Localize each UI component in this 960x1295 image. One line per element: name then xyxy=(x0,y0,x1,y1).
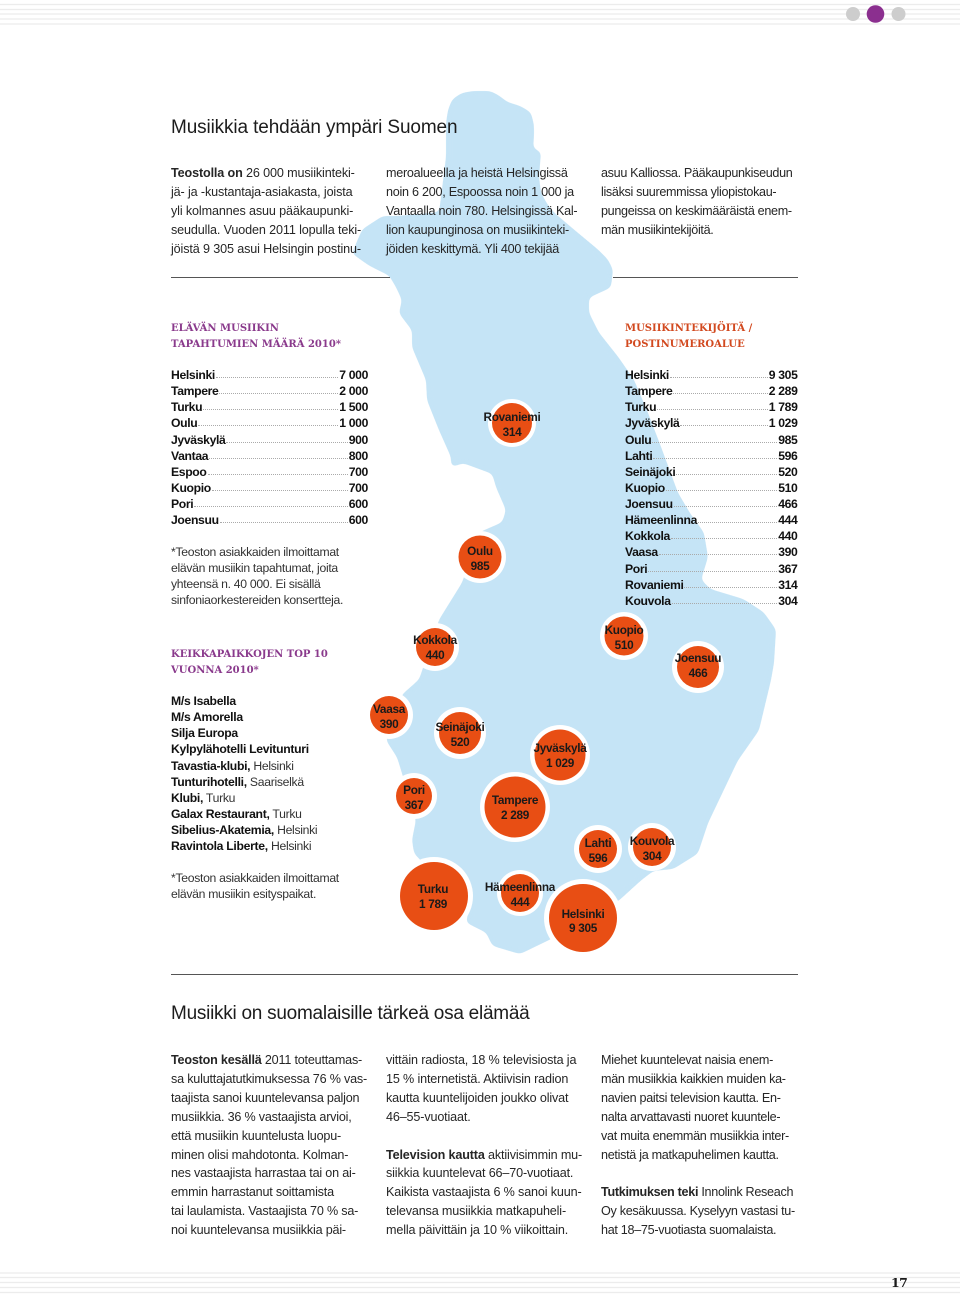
lower text column 3: Oy kesäkuussa. Kyselyyn vastasi tu- xyxy=(601,1204,795,1218)
lower text column 2 xyxy=(386,1053,582,1237)
list: live music events by city: 800 xyxy=(349,449,368,463)
list: top 10 venues: Klubi, Turku xyxy=(171,791,235,805)
list: music makers by postal area: Turku xyxy=(625,400,656,414)
bubble: Jyväskylä xyxy=(530,725,590,785)
bubble: Turku xyxy=(395,857,473,935)
bubble: Kokkola: Kokkola xyxy=(413,633,458,647)
bubble: Lahti xyxy=(574,825,622,873)
bubble: Kouvola: 304 xyxy=(643,849,662,863)
list: music makers by postal area: Vaasa xyxy=(625,545,658,559)
heading: top 10 venues: VUONNA 2010* xyxy=(171,664,259,676)
list: live music events by city: Tampere xyxy=(171,384,218,398)
heading: top 10 venues: KEIKKAPAIKKOJEN TOP 10 xyxy=(171,648,328,660)
list: live music events by city xyxy=(171,368,368,527)
map shape xyxy=(353,92,775,953)
heading: music makers by postal area xyxy=(625,321,752,350)
bubble: Joensuu xyxy=(672,641,724,693)
text column 3: pungeissa on keskimääräistä enem- xyxy=(601,204,792,218)
lower text column 2: 15 % internetistä. Aktiivisin radion xyxy=(386,1072,568,1086)
heading: live music events: ELÄVÄN MUSIIKIN xyxy=(171,322,279,334)
list: music makers by postal area: Rovaniemi xyxy=(625,578,683,592)
bubble: Hämeenlinna xyxy=(485,870,556,916)
lower text column 3: nalta arvattavasti nuoret kuuntele- xyxy=(601,1110,780,1124)
bubble: Tampere xyxy=(480,772,550,842)
note: venues xyxy=(171,871,340,901)
bubble: Pori xyxy=(391,773,437,819)
bubble: Seinäjoki xyxy=(434,707,486,759)
bubble: Rovaniemi: Rovaniemi xyxy=(484,410,540,424)
bubble: Seinäjoki: Seinäjoki xyxy=(435,720,485,734)
bubble: Kokkola xyxy=(411,623,459,671)
lower text column 3: vat muita enemmän musiikkia inter- xyxy=(601,1129,789,1143)
heading: live music events xyxy=(171,322,341,350)
bubble: Seinäjoki: 520 xyxy=(451,735,470,749)
lower text column 1: Teoston kesällä 2011 toteuttamas- xyxy=(171,1053,362,1067)
heading: top 10 venues xyxy=(170,648,328,676)
list: top 10 venues xyxy=(171,694,317,853)
bubble: Kuopio xyxy=(600,612,648,660)
bubble: Vaasa: Vaasa xyxy=(373,702,406,716)
bubble: Jyväskylä: Jyväskylä xyxy=(533,741,587,755)
list: live music events by city: Helsinki xyxy=(171,368,215,382)
lower text column 3: Tutkimuksen teki Innolink Reseach xyxy=(601,1185,793,1199)
list: music makers by postal area: 596 xyxy=(778,449,798,463)
note: venues: elävän musiikin esityspaikat. xyxy=(171,887,316,901)
title: lower section: Musiikki on suomalaisille tärkeä osa elämää xyxy=(171,1002,529,1024)
text column 1: jä- ja -kustantaja-asiakasta, joista xyxy=(171,184,353,198)
list: live music events by city: Kuopio xyxy=(171,481,211,495)
lower text column 1: minen olisi mahdotonta. Kolman- xyxy=(171,1148,348,1162)
list: music makers by postal area: Jyväskylä xyxy=(625,416,679,430)
lower text column 2: Kaikista vastaajista 6 % sanoi kuun- xyxy=(386,1185,582,1199)
text column 2: lion kaupunginosa on musiikinteki- xyxy=(386,222,569,236)
list: music makers by postal area: Joensuu xyxy=(625,497,673,511)
note: live music events: yhteensä n. 40 000. Ei sisällä xyxy=(171,577,321,591)
list: live music events by city: 700 xyxy=(349,465,368,479)
lower text column 3: navien paitsi television kautta. En- xyxy=(601,1091,781,1105)
bubble: Pori: Pori xyxy=(403,783,425,797)
list: music makers by postal area: 1 029 xyxy=(769,416,798,430)
bubble: Tampere: 2 289 xyxy=(501,808,530,822)
note: live music events: sinfoniaorkestereiden konsertteja. xyxy=(171,593,343,607)
lower text column 1: tai laulamista. Vastaajista 70 % sa- xyxy=(171,1204,358,1218)
text column 3: män musiikintekijöitä. xyxy=(601,222,713,236)
list: music makers by postal area: Kuopio xyxy=(625,481,665,495)
list: music makers by postal area: Kokkola xyxy=(625,529,670,543)
lower text column 1: sa kuluttajatutkimuksessa 76 % vas- xyxy=(171,1072,367,1086)
list: music makers by postal area: Oulu xyxy=(625,432,651,446)
bubble: Helsinki xyxy=(544,879,622,957)
note: live music events: elävän musiikin tapahtumat, joita xyxy=(171,561,338,575)
bubble: Helsinki: 9 305 xyxy=(569,921,598,935)
list: top 10 venues: M/s Amorella xyxy=(171,710,243,724)
text column 2: noin 6 200, Espoossa noin 1 000 ja xyxy=(386,184,574,198)
list: music makers by postal area: 9 305 xyxy=(769,368,798,382)
page number: 17 xyxy=(891,1275,907,1290)
bubble: Vaasa xyxy=(365,691,413,739)
list: live music events by city: 1 000 xyxy=(339,416,368,430)
text column 3: asuu Kalliossa. Pääkaupunkiseudun xyxy=(601,166,792,180)
text column 1: jöistä 9 305 asui Helsingin postinu- xyxy=(171,242,361,256)
bubble: Oulu: Oulu xyxy=(467,544,493,558)
bubble: Hämeenlinna: 444 xyxy=(511,895,530,909)
list: music makers by postal area: 304 xyxy=(778,594,798,608)
note: live music events: *Teoston asiakkaiden ilmoittamat xyxy=(171,545,339,559)
bubble: Tampere: Tampere xyxy=(492,793,539,807)
lower text column 2: siikkia kuuntelevat 66–70-vuotiaat. xyxy=(386,1166,573,1180)
lower text column 2: televansa musiikkia matkapuheli- xyxy=(386,1204,566,1218)
bubble: Oulu xyxy=(454,531,506,583)
text column 2 xyxy=(386,166,577,256)
lower text column 3 xyxy=(601,1053,795,1237)
bubble: Joensuu: Joensuu xyxy=(675,651,721,665)
lower text column 3: Miehet kuuntelevat naisia enem- xyxy=(601,1053,773,1067)
title: top section: Musiikkia tehdään ympäri Suomen xyxy=(171,116,457,138)
bubble: Oulu: 985 xyxy=(471,559,490,573)
list: music makers by postal area: 367 xyxy=(778,562,798,576)
bubble: Kuopio: Kuopio xyxy=(605,623,644,637)
list: live music events by city: Espoo xyxy=(171,465,206,479)
list: music makers by postal area xyxy=(625,368,798,608)
rule right xyxy=(613,277,798,278)
list: top 10 venues: M/s Isabella xyxy=(171,694,236,708)
lower text column 3: hat 18–75-vuotiasta suomalaista. xyxy=(601,1223,776,1237)
list: live music events by city: 1 500 xyxy=(339,400,368,414)
note: venues: *Teoston asiakkaiden ilmoittamat xyxy=(171,871,339,885)
list: top 10 venues: Silja Europa xyxy=(171,726,238,740)
list: live music events by city: 2 000 xyxy=(339,384,368,398)
lower text column 1: musiikkia. 36 % vastaajista arvioi, xyxy=(171,1110,352,1124)
text column 2: jöiden keskittymä. Yli 400 tekijää xyxy=(386,242,559,256)
list: music makers by postal area: Lahti xyxy=(625,449,652,463)
list: music makers by postal area: Tampere xyxy=(625,384,672,398)
text column 3: lisäksi suuremmissa yliopistokau- xyxy=(601,184,776,198)
bubble: Jyväskylä: 1 029 xyxy=(546,756,575,770)
text column 1: yli kolmannes asuu pääkaupunki- xyxy=(171,204,353,218)
list: live music events by city: Pori xyxy=(171,497,193,511)
text column 1 xyxy=(170,166,361,256)
heading: music makers by postal area: MUSIIKINTEKIJÖITÄ / xyxy=(625,322,752,334)
bubble: Helsinki: Helsinki xyxy=(562,907,604,921)
list: top 10 venues: Tavastia-klubi, Helsinki xyxy=(171,758,294,772)
text column 3 xyxy=(601,166,792,236)
list: live music events by city: 600 xyxy=(349,497,368,511)
rule left xyxy=(171,277,390,278)
bubble: Turku: 1 789 xyxy=(419,897,448,911)
text column 1: seudulla. Vuoden 2011 lopulla teki- xyxy=(171,222,361,236)
list: live music events by city: 600 xyxy=(349,513,368,527)
list: top 10 venues: Galax Restaurant, Turku xyxy=(171,807,302,821)
list: music makers by postal area: Seinäjoki xyxy=(625,465,675,479)
list: live music events by city: 700 xyxy=(349,481,368,495)
bubble: Kuopio: 510 xyxy=(615,638,634,652)
list: top 10 venues: Tunturihotelli, Saariselkä xyxy=(171,775,304,789)
list: live music events by city: Turku xyxy=(171,400,202,414)
lower text column 2: mella päivittäin ja 10 % viikoittain. xyxy=(386,1223,568,1237)
bubble: Rovaniemi: 314 xyxy=(503,425,522,439)
lower text column 2: 46–55-vuotiaat. xyxy=(386,1110,471,1124)
bubble: Kokkola: 440 xyxy=(426,648,445,662)
list: top 10 venues: Kylpylähotelli Levitunturi xyxy=(171,742,309,756)
lower text column 2: vittäin radiosta, 18 % televisiosta ja xyxy=(386,1053,576,1067)
text column 1: Teostolla on 26 000 musiikinteki- xyxy=(171,166,355,180)
bubble: Lahti: 596 xyxy=(589,851,608,865)
lower text column 1: noi kuuntelevansa musiikkia päi- xyxy=(171,1223,346,1237)
list: live music events by city: Joensuu xyxy=(171,513,219,527)
list: top 10 venues: Ravintola Liberte, Helsinki xyxy=(171,839,311,853)
bubble: Turku: Turku xyxy=(418,882,448,896)
lower text column 1: taajista sanoi kuuntelevansa paljon xyxy=(171,1091,359,1105)
list: music makers by postal area: 2 289 xyxy=(769,384,798,398)
list: live music events by city: Jyväskylä xyxy=(171,432,225,446)
list: music makers by postal area: 390 xyxy=(778,545,798,559)
navigation dots xyxy=(846,5,906,23)
heading: music makers by postal area: POSTINUMEROALUE xyxy=(625,338,745,350)
bubble: Joensuu: 466 xyxy=(689,666,708,680)
bubble: Pori: 367 xyxy=(405,798,424,812)
list: music makers by postal area: 444 xyxy=(778,513,798,527)
list: live music events by city: Oulu xyxy=(171,416,197,430)
lower text column 1 xyxy=(171,1053,367,1237)
list: live music events by city: Vantaa xyxy=(171,449,208,463)
text column 2: meroalueella ja heistä Helsingissä xyxy=(386,166,568,180)
list: music makers by postal area: 510 xyxy=(778,481,798,495)
heading: live music events: TAPAHTUMIEN MÄÄRÄ 2010* xyxy=(171,338,341,350)
text column 2: Vantaalla noin 780. Helsingissä Kal- xyxy=(386,204,577,218)
bubble: Vaasa: 390 xyxy=(380,717,399,731)
list: music makers by postal area: 314 xyxy=(778,578,798,592)
bubble: Lahti: Lahti xyxy=(585,836,611,850)
lower text column 3: netistä ja matkapuhelimen kautta. xyxy=(601,1148,779,1162)
rule middle xyxy=(171,974,798,975)
list: top 10 venues: Sibelius-Akatemia, Helsinki xyxy=(171,823,317,837)
list: music makers by postal area: Hämeenlinna xyxy=(625,513,697,527)
bubble: Rovaniemi xyxy=(484,399,540,447)
list: music makers by postal area: 440 xyxy=(778,529,798,543)
lower text column 1: emmin harrastanut soittamista xyxy=(171,1185,334,1199)
lower text column 1: nes vastaajista harrastaa tai on ai- xyxy=(171,1166,356,1180)
list: music makers by postal area: Pori xyxy=(625,562,647,576)
list: music makers by postal area: Kouvola xyxy=(625,594,671,608)
bubble: Hämeenlinna: Hämeenlinna xyxy=(485,880,556,894)
lower text column 3: män musiikkia kaikkien muiden ka- xyxy=(601,1072,786,1086)
list: music makers by postal area: 1 789 xyxy=(769,400,798,414)
list: music makers by postal area: 985 xyxy=(778,432,798,446)
list: music makers by postal area: 466 xyxy=(778,497,798,511)
list: live music events by city: 900 xyxy=(349,432,368,446)
note: live music events xyxy=(171,545,343,607)
lower text column 2: kautta kuuntelijoiden joukko olivat xyxy=(386,1091,568,1105)
list: music makers by postal area: Helsinki xyxy=(625,368,669,382)
list: music makers by postal area: 520 xyxy=(778,465,798,479)
lower text column 2: Television kautta aktiivisimmin mu- xyxy=(386,1148,582,1162)
list: live music events by city: 7 000 xyxy=(339,368,368,382)
lower text column 1: että musiikin kuuntelusta luopu- xyxy=(171,1129,341,1143)
bubble: Kouvola xyxy=(628,823,676,871)
bubble: Kouvola: Kouvola xyxy=(630,834,675,848)
